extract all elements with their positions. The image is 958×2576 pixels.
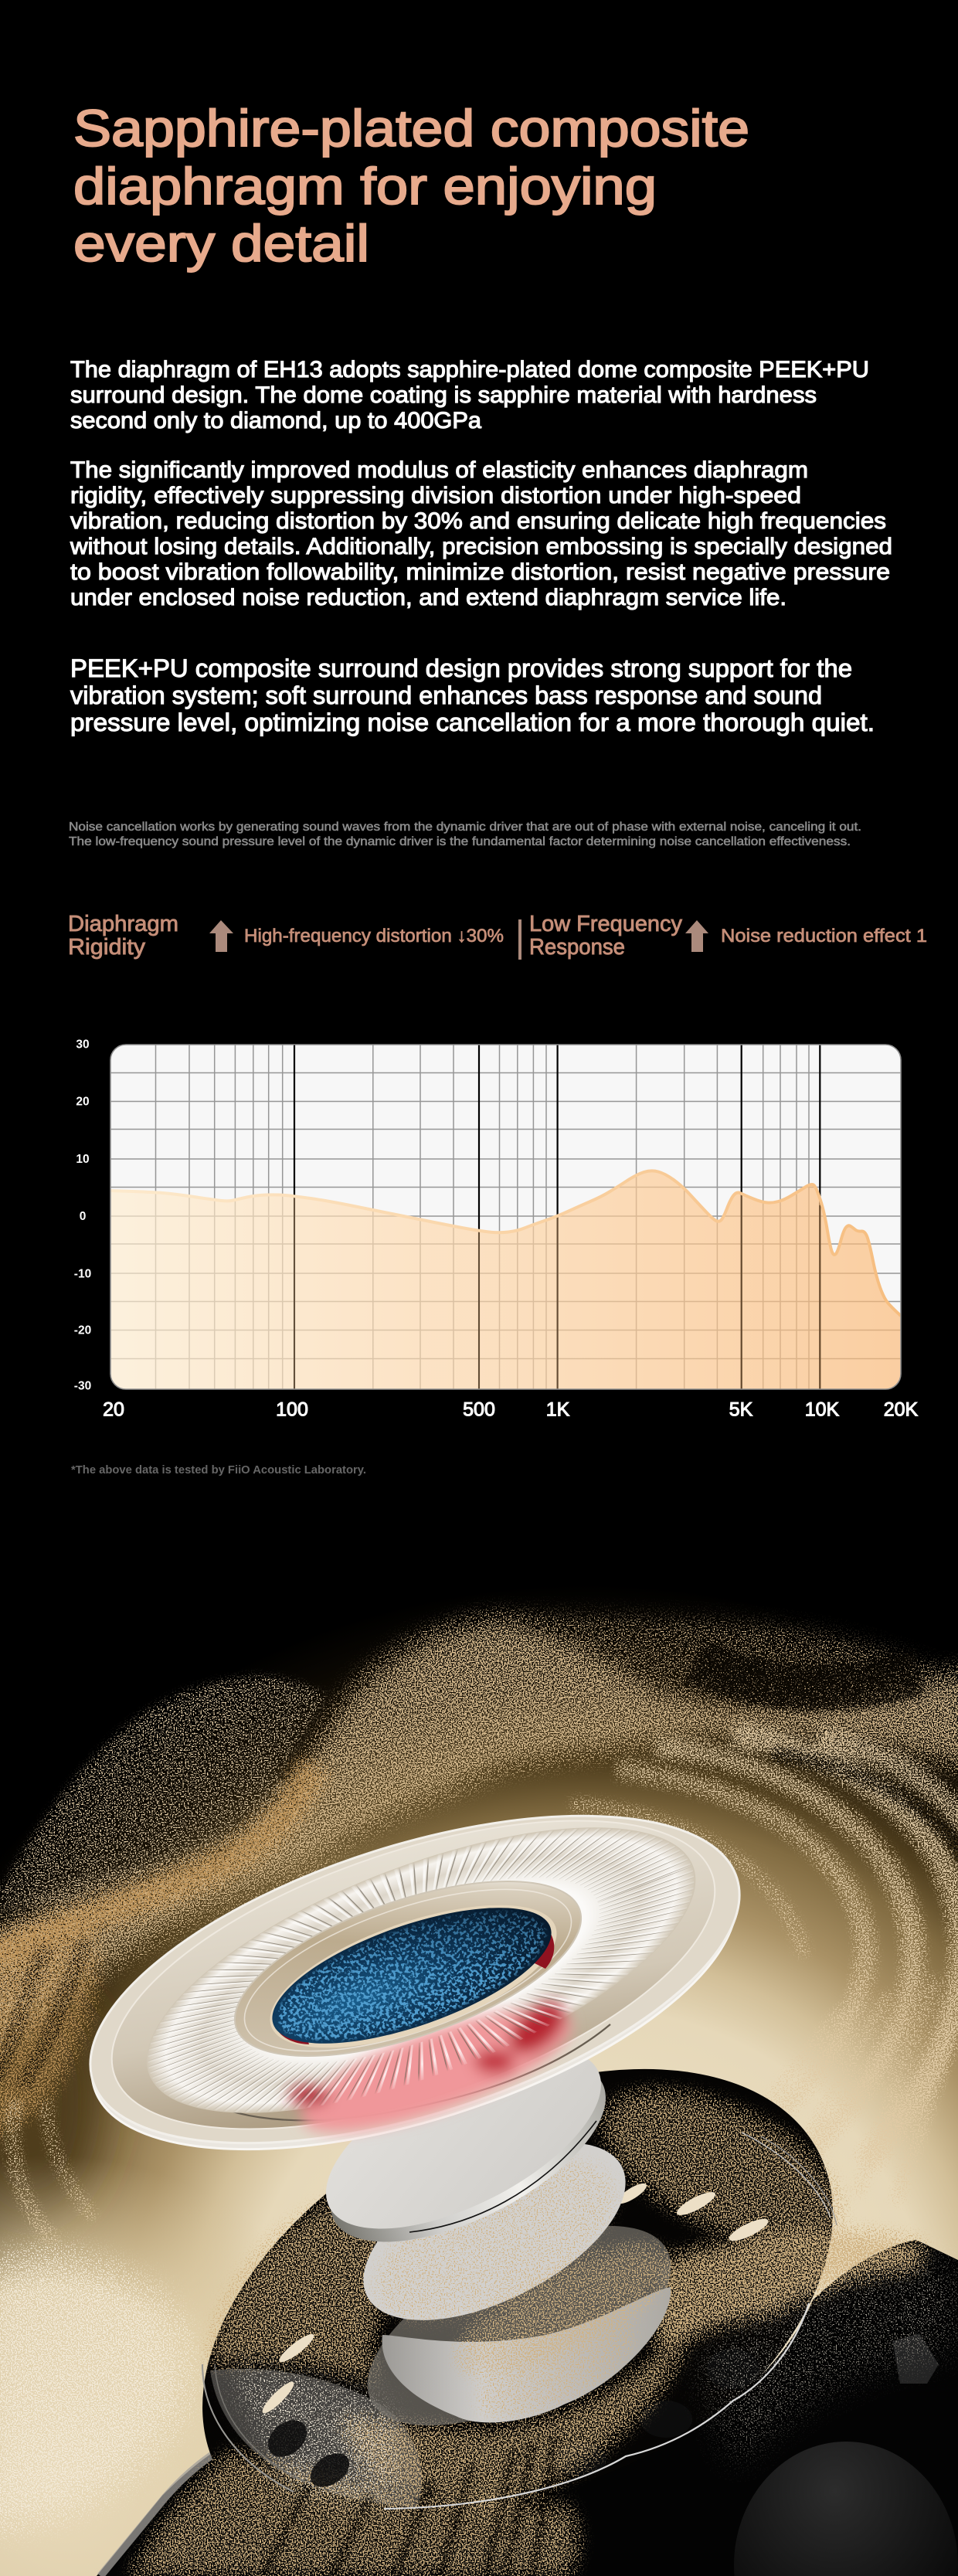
y axis labels: -10 [74, 1267, 91, 1281]
stacked disc B [336, 2106, 653, 2357]
text block: PEEK+PU surround: pressure level, optimizing noise cancellation for a more thorough quiet. [70, 709, 875, 736]
text block: modulus of elasticity: The significantly improved modulus of elasticity enhances diaphragm [70, 457, 808, 483]
text block: sapphire dome: second only to diamond, up to 400GPa [70, 408, 481, 433]
curve line [110, 1171, 901, 1316]
y axis labels: -30 [74, 1380, 91, 1392]
sand: main dense ribbon [0, 1619, 958, 2055]
translucent rim [53, 1750, 777, 2209]
text block: sapphire dome: The diaphragm of EH13 adopts sapphire-plated dome composite PEEK+PU [70, 357, 869, 382]
label: diaphragm rigidity: Diaphragm [68, 912, 178, 936]
sparse white specks on housing [232, 2256, 958, 2496]
plateau ring [214, 1845, 602, 2092]
frequency response chart [74, 1038, 919, 1420]
plot area [110, 1045, 901, 1389]
dome texture [263, 1885, 560, 2066]
x axis labels: 500 [463, 1398, 495, 1420]
footnote: *The above data is tested by FiiO Acoustic Laboratory. [71, 1464, 366, 1477]
black housing lower left [97, 2287, 958, 2576]
y axis labels: 0 [80, 1210, 86, 1223]
note: noise cancellation: The low-frequency sound pressure level of the dynamic driver is the fundamental factor determining noise cancellation effectiveness. [69, 835, 851, 848]
title: Sapphire-plated composite [73, 100, 749, 158]
title: every detail [73, 215, 369, 273]
text block: modulus of elasticity: under enclosed noise reduction, and extend diaphragm service life. [70, 585, 786, 610]
x axis labels: 5K [729, 1398, 753, 1420]
product image: exploded driver in sand [0, 1584, 958, 2576]
stacked disc C [338, 2185, 701, 2466]
sand: left sparse plume [0, 1678, 324, 1908]
text block: modulus of elasticity [70, 457, 892, 610]
outer rim thickness [54, 1759, 774, 2215]
red heat band [289, 1986, 584, 2156]
text block: modulus of elasticity: vibration, reducing distortion by 30% and ensuring delicate high frequencies [70, 508, 886, 534]
y axis labels [74, 1038, 91, 1392]
label: diaphragm rigidity: Rigidity [68, 935, 146, 960]
text block: modulus of elasticity: to boost vibration followability, minimize distortion, resist negative pressure [70, 559, 890, 585]
sapphire dome [256, 1880, 567, 2071]
y axis labels: 10 [76, 1153, 90, 1166]
lower dark inner edge [209, 2024, 610, 2120]
text block: sapphire dome: surround design. The dome coating is sapphire material with hardness [70, 382, 817, 408]
streaks through sand [263, 2434, 556, 2576]
icon: up arrow [685, 920, 708, 952]
x axis labels [103, 1398, 919, 1420]
title: diaphragm for enjoying [73, 158, 657, 216]
sand: pale cloud lower left [0, 2256, 185, 2527]
text block: modulus of elasticity: rigidity, effectively suppressing division distortion under high-speed [70, 483, 801, 508]
title [73, 100, 749, 273]
sand: dark striations [0, 1661, 958, 2086]
text block: sapphire dome [70, 357, 869, 433]
text block: PEEK+PU surround [70, 654, 875, 736]
x axis labels: 20K [884, 1398, 919, 1420]
icon: up arrow [209, 920, 233, 952]
sand on pale discs [351, 2129, 685, 2435]
label: diaphragm rigidity [68, 912, 178, 960]
perforated black disc [121, 1969, 914, 2576]
grey translucent lower-left of disc [210, 2369, 422, 2507]
x axis labels: 20 [103, 1398, 124, 1420]
sand: concentric arcs [13, 1735, 958, 2241]
surround base [112, 1769, 730, 2172]
text: noise reduction: Noise reduction effect 1 [721, 926, 927, 946]
sand: amber ribbon [0, 1765, 313, 2140]
label: low frequency response [529, 912, 682, 960]
curve fill [110, 1171, 901, 1389]
y axis labels: 30 [76, 1038, 90, 1051]
diaphragm [53, 1750, 777, 2215]
x axis labels: 100 [276, 1398, 308, 1420]
stacked disc A: metal puck [300, 2012, 632, 2279]
label: low frequency response: Response [529, 935, 625, 960]
glowing beige backdrop [0, 1584, 958, 2576]
label: low frequency response: Low Frequency [529, 912, 682, 936]
y axis labels: -20 [74, 1324, 91, 1337]
lens cut-outs in disc [259, 2180, 771, 2417]
radial ribs [167, 1804, 675, 2136]
black rear housing [550, 2240, 958, 2576]
x axis labels: 10K [805, 1398, 840, 1420]
text block: PEEK+PU surround: PEEK+PU composite surround design provides strong support for the [70, 654, 852, 682]
note: noise cancellation: Noise cancellation works by generating sound waves from the dynamic driver that are out of phase with external noise, canceling it out. [69, 821, 861, 834]
y axis labels: 20 [76, 1096, 90, 1108]
dome edge [253, 1875, 573, 2078]
text block: PEEK+PU surround: vibration system; soft surround enhances bass response and sound [70, 681, 822, 709]
round holes in disc [261, 2413, 355, 2494]
text block: modulus of elasticity: without losing details. Additionally, precision embossing is specially designed [70, 534, 892, 559]
inner basin [75, 1758, 752, 2192]
sand over disc and housing [131, 2061, 923, 2576]
feature row [68, 912, 927, 960]
note: noise cancellation [69, 821, 861, 848]
text: distortion: High-frequency distortion ↓30% [244, 926, 504, 946]
separator [518, 919, 521, 960]
x axis labels: 1K [546, 1398, 570, 1420]
glossy rim lines [202, 2133, 837, 2509]
